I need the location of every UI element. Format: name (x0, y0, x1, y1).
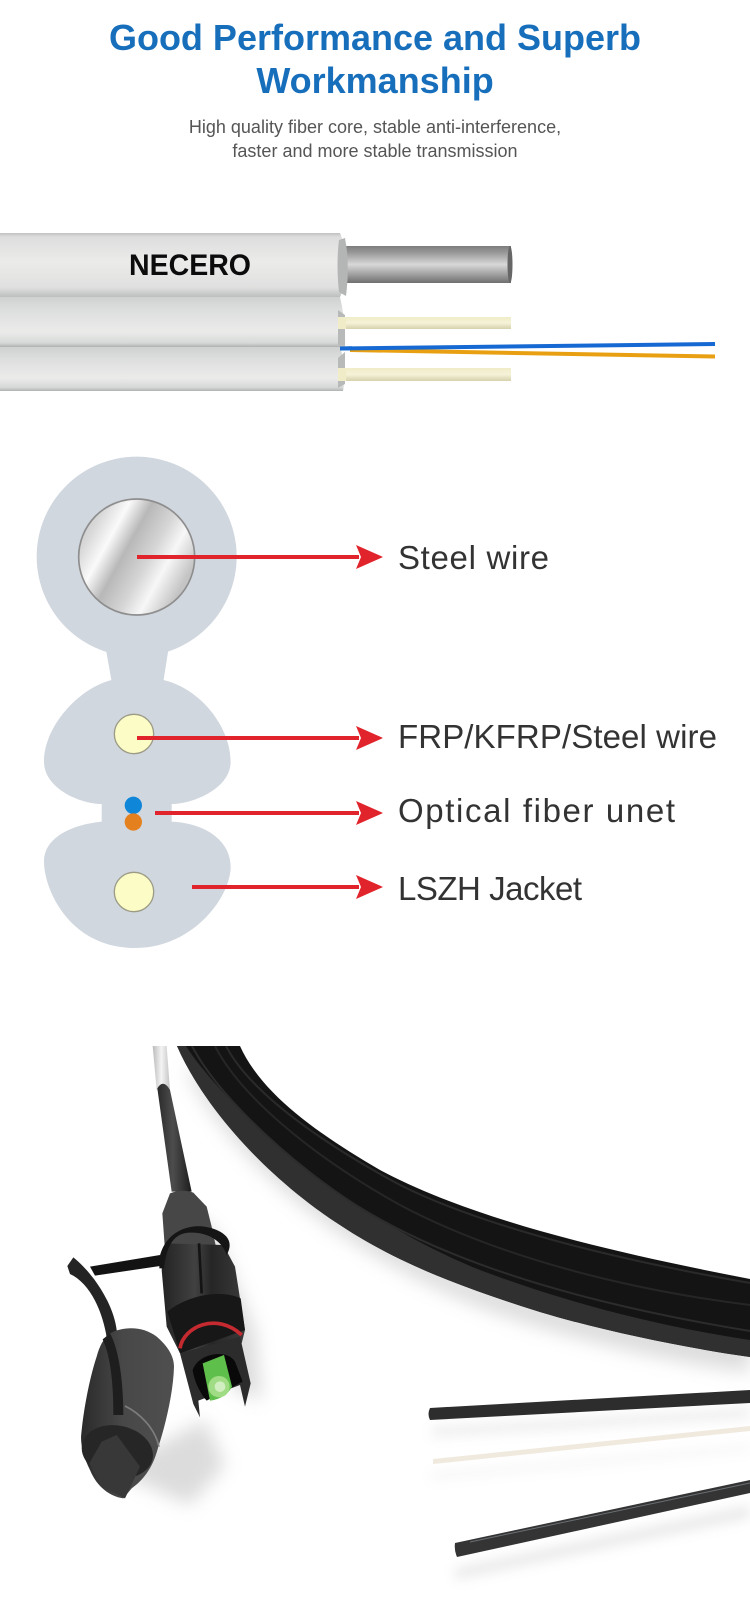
title (109, 17, 641, 101)
brand name: NECERO (129, 249, 251, 282)
cable jacket (0, 233, 348, 391)
arrow: jacket (192, 875, 383, 899)
title: Workmanship (256, 60, 494, 101)
soft shadows (110, 1070, 750, 1580)
label: FRP/KFRP/Steel wire: FRP/KFRP/Steel wire (398, 718, 717, 755)
cable product illustration (0, 233, 715, 391)
blue and orange fibers (340, 344, 715, 356)
cross-section diagram (37, 457, 717, 948)
subtitle text: High quality fiber core, stable anti-interference, (189, 117, 561, 137)
arrow: optical fiber (155, 801, 383, 825)
title: Good Performance and Superb (109, 17, 641, 58)
cut cable ends (428, 1390, 750, 1557)
label: LSZH jacket: LSZH Jacket (398, 870, 582, 907)
cable cross-section shape (37, 457, 237, 948)
black coiled cable bundle (177, 1046, 750, 1357)
connector assembly (67, 1046, 251, 1417)
label: optical fiber: Optical fiber unet (398, 792, 675, 829)
label: steel wire: Steel wire (398, 539, 549, 576)
arrow: steel wire (137, 545, 383, 569)
protective cap (77, 1328, 174, 1498)
subtitle text: faster and more stable transmission (232, 141, 518, 161)
FRP rods (335, 317, 511, 381)
rod and core faces (338, 317, 352, 381)
product photo illustration (67, 1046, 750, 1580)
arrow: FRP (137, 726, 383, 750)
steel wire core (335, 246, 512, 283)
subtitle text (189, 117, 561, 161)
